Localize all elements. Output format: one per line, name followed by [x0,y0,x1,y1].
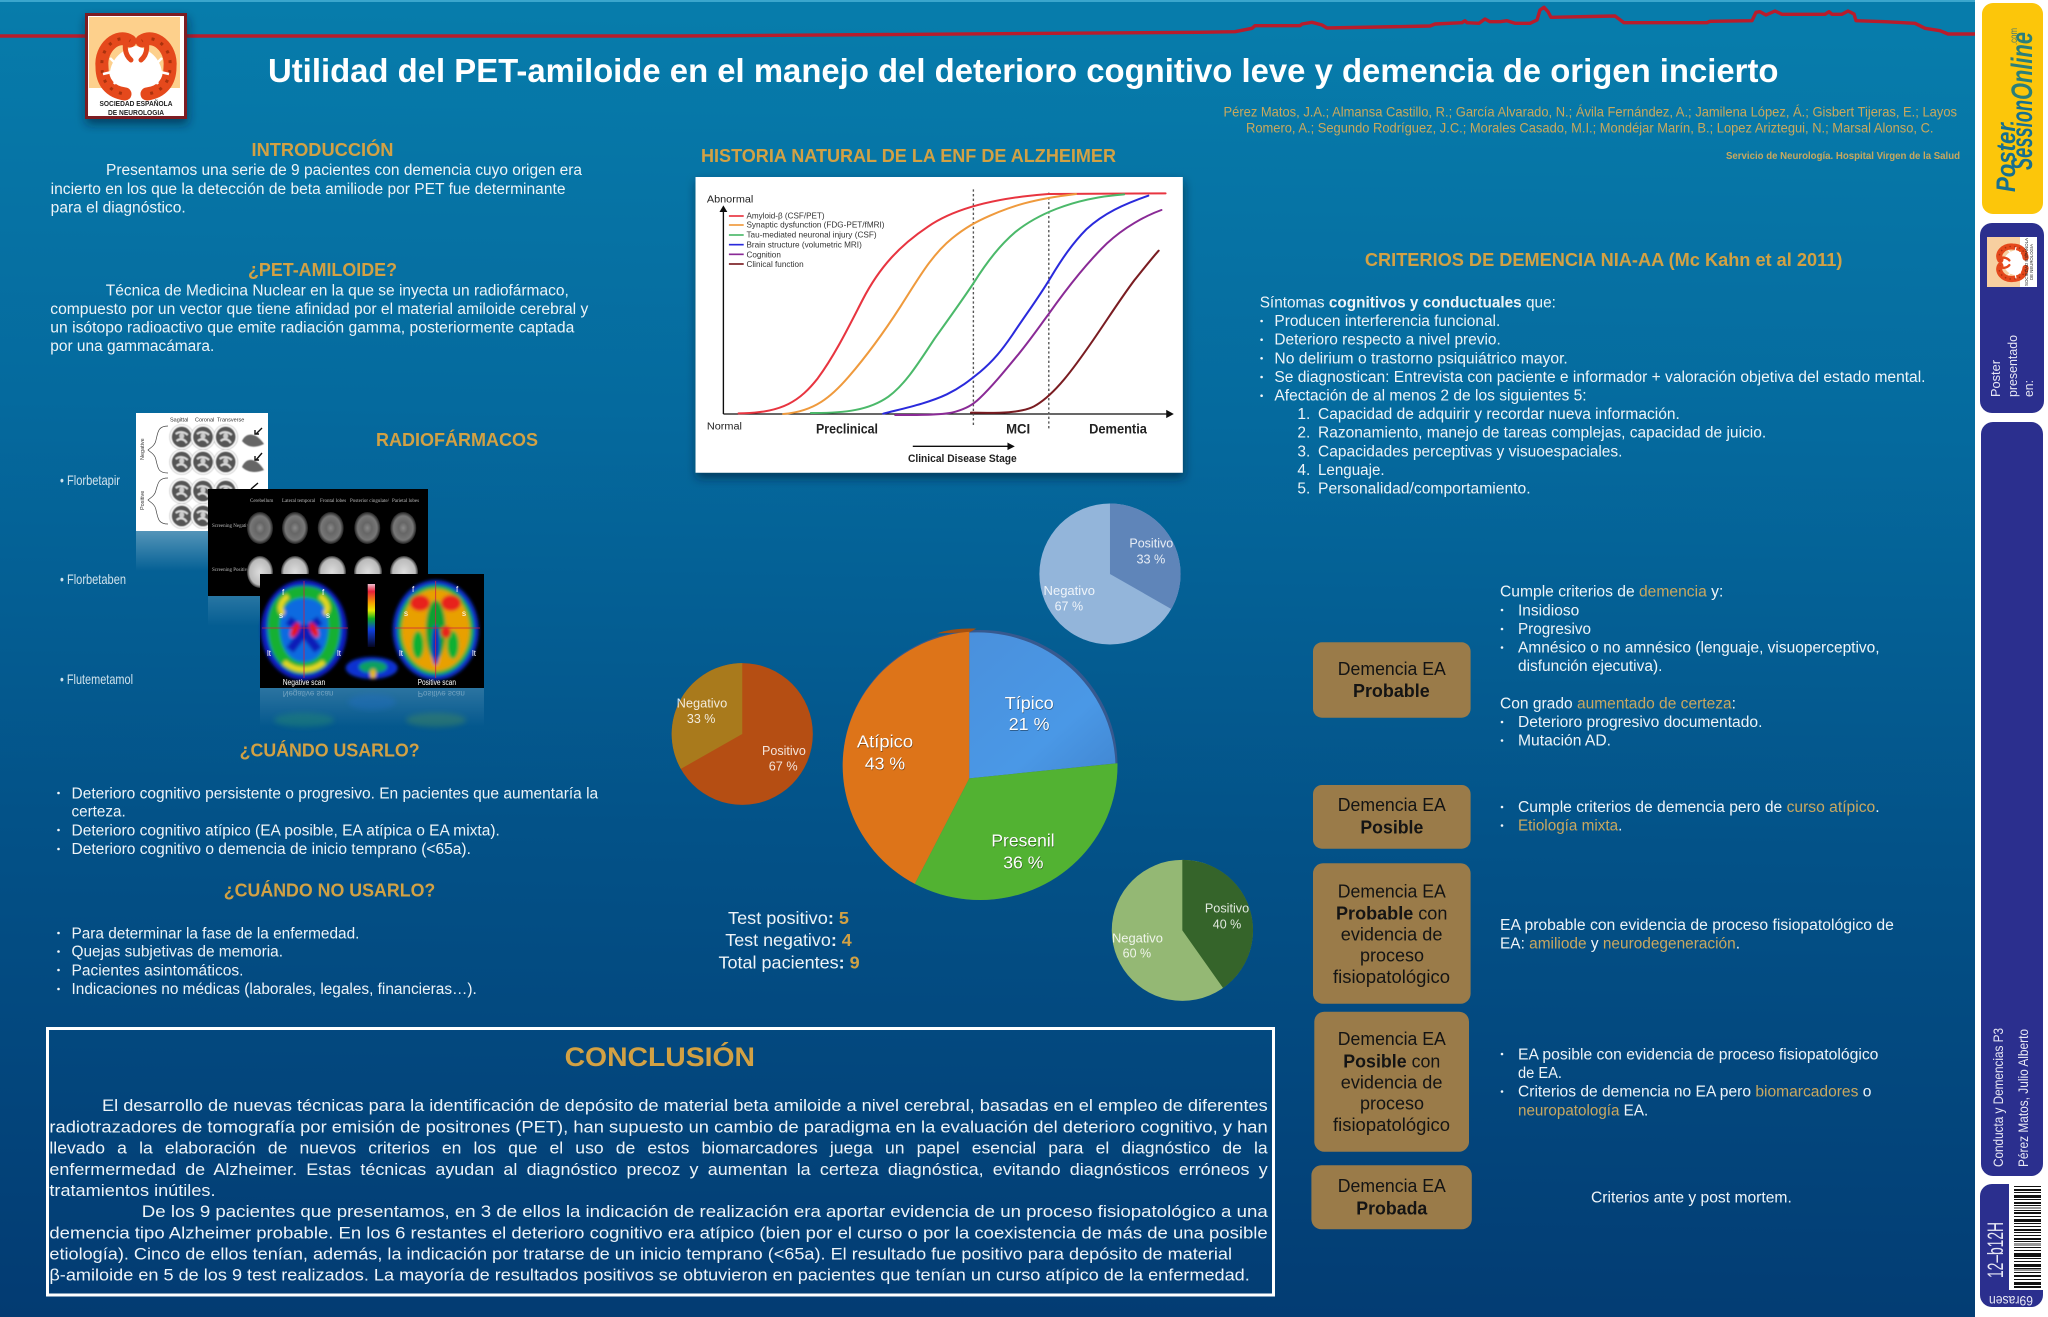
dementia criteria list: Se diagnostican: Entrevista con paciente e informador + valoración objetiva del estado mental. [1274,369,1926,386]
section: cuándo no usarlo [57,880,477,998]
sidebar: PosterSessionOnline badge: .com [2009,28,2020,45]
logo: Sociedad Española de Neurología: SOCIEDAD ESPAÑOLA [100,99,173,108]
pie: negativo/positivo green: 60 % [1123,947,1151,961]
heading: historia natural: HISTORIA NATURAL DE LA ENF DE ALZHEIMER [701,146,1116,166]
image: coloured PET negative and positive scan: Positive scan [418,689,465,698]
sidebar: barcode panel [1980,1184,2044,1309]
authors: Romero, A.; Segundo Rodríguez, J.C.; Morales Casado, M.I.; Mondéjar Marín, B.; Lopez Ariztegui, N.; Marsal Alonso, C. [1246,119,1934,135]
box: demencia EA posible con evidencia: Demencia EA [1338,1029,1446,1049]
pie: tipico, presenil, atipico: 36 % [1003,853,1044,873]
image: amyloid scan grid: Posterior cingulate/ [350,499,390,504]
section: cuándo usarlo: ¿CUÁNDO USARLO? [240,740,420,761]
authors: Pérez Matos, J.A.; Almansa Castillo, R.; García Alvarado, N.; Ávila Fernández, A.; Jamilena López, Á.; Gisbert Tijeras, E.; Layos [1224,104,1957,120]
text: EA probable con evidencia: EA probable con evidencia de proceso fisiopatológico de [1500,917,1894,934]
section: introducción: para el diagnóstico. [51,200,186,216]
box: demencia EA probable con evidencia: fisiopatológico [1333,967,1450,987]
image: amyloid scan grid: Parietal lobes [392,499,419,504]
text: criterios demencia EA probable [1500,584,1880,750]
dementia criteria list: 2. [1297,425,1310,442]
affiliation: Servicio de Neurología. Hospital Virgen de la Salud [1726,150,1960,162]
heading: conclusión: CONCLUSIÓN [565,1041,755,1072]
pie: negativo/positivo orange: 67 % [769,760,798,774]
text: criterios demencia EA probable: Deterioro progresivo documentado. [1518,714,1762,731]
box: demencia EA probable: Probable [1353,681,1430,701]
sidebar: presented at: Poster [1988,359,2003,397]
sidebar: presented at: presentado [2005,335,2020,397]
sidebar: session and author: Pérez Matos, Julio Alberto [2015,1029,2031,1167]
section: cuándo usarlo: Deterioro cognitivo persistente o progresivo. En pacientes que aumentaría la [72,785,599,802]
text: EA posible con evidencia [1501,1046,1878,1119]
axis labels [707,194,1147,465]
image: coloured PET negative and positive scan: f [282,588,285,597]
text: EA probable con evidencia: EA: amiliode y neurodegeneración. [1500,936,1740,953]
sidebar: barcode panel: 69rasen [1989,1293,2033,1309]
pie: negativo/positivo blue: 67 % [1055,599,1083,614]
text: EA probable con evidencia [1500,917,1894,953]
conclusion text: El desarrollo de nuevas técnicas para la identificación de depósito de material beta amiloide a nivel cerebral, basadas en el empleo de diferentes [102,1096,1268,1115]
text: EA posible con evidencia: EA posible con evidencia de proceso fisiopatológico [1518,1046,1878,1063]
sidebar: presented at: en: [2021,380,2036,397]
dementia criteria list: No delirium o trastorno psiquiátrico mayor. [1274,350,1568,367]
pie: tipico, presenil, atipico: 43 % [865,754,905,774]
box: demencia EA posible: Posible [1360,817,1423,837]
legend: Cognition [746,250,781,259]
text: criterios demencia EA probable: disfunción ejecutiva). [1518,658,1662,675]
image: coloured PET negative and positive scan: s [326,611,330,620]
conclusion text: llevado a la elaboración de nuevos criterios en los que el uso de estos biomarcadores juega un papel esencial para el diagnóstico de la [49,1139,1268,1158]
pie: negativo/positivo orange: 33 % [687,712,716,727]
box: demencia EA probable con evidencia: Demencia EA [1338,881,1446,901]
pie: tipico, presenil, atipico: Presenil [991,831,1055,851]
dementia criteria list: Deterioro respecto a nivel previo. [1274,332,1501,349]
section: cuándo no usarlo: Para determinar la fase de la enfermedad. [72,925,359,942]
pie: tipico, presenil, atipico: 21 % [1009,715,1049,735]
section: cuándo usarlo: certeza. [72,804,126,821]
logo: Sociedad Española de Neurología: DE NEUROLOGIA [108,108,165,117]
dementia criteria list: 1. [1297,406,1310,423]
conclusion text [49,1096,1268,1285]
section: pet-amiloide [50,260,589,355]
sidebar: PosterSessionOnline badge: Poster [1991,122,2021,192]
radiopharmaceutical list: • Florbetapir [60,472,120,488]
sidebar: PosterSessionOnline badge [1982,3,2043,214]
section: pet-amiloide: ¿PET-AMILOIDE? [248,260,397,280]
sidebar: PosterSessionOnline badge: Session [2006,100,2039,170]
section: introducción: Presentamos una serie de 9 pacientes con demencia cuyo origen era [106,162,582,179]
pie: negativo/positivo green: Negativo [1112,932,1163,946]
dementia criteria list: 4. [1297,462,1310,479]
section: pet-amiloide: por una gammacámara. [50,338,214,355]
pie: negativo/positivo blue: Positivo [1129,537,1173,551]
sidebar: session and author [1981,422,2043,1176]
image: coloured PET negative and positive scan: Positive scan [418,678,456,687]
stage dividers [973,189,1049,428]
box: demencia EA posible con evidencia: Posible con [1343,1051,1440,1071]
image: amyloid scan grid: Lateral temporal [282,499,316,504]
conclusion text: De los 9 pacientes que presentamos, en 3 de ellos la indicación de realización era aportar evidencia de un proceso fisiopatológico a una [142,1202,1268,1221]
section: cuándo usarlo [57,740,599,858]
text: EA posible con evidencia: neuropatología EA. [1518,1102,1648,1119]
sidebar: barcode panel: 12–b12H [1983,1222,2008,1278]
dementia criteria list: Producen interferencia funcional. [1274,313,1500,330]
box: demencia EA probable: Demencia EA [1338,659,1446,679]
pie: negativo/positivo green [1112,860,1253,1001]
text: criterios demencia EA probable: Insidioso [1518,602,1579,619]
text: EA posible con evidencia: de EA. [1518,1065,1562,1082]
axes [721,207,1172,417]
sidebar logo: SOCIEDAD ESPAÑOLA [2023,238,2029,286]
conclusion text: demencia tipo Alzheimer probable. En los 6 restantes el deterioro cognitivo era atípico (bien por el curso o por la coexistencia de más de una posible [49,1223,1268,1242]
dementia criteria list: Capacidades perceptivas y visuoespaciales. [1318,443,1622,460]
image: amyloid scan grid: Cerebellum [250,499,273,504]
axis labels: Abnormal [707,194,753,206]
logo: Sociedad Española de Neurología [86,14,186,118]
image: coloured PET negative and positive scan: lt [399,649,404,658]
axis labels: Dementia [1089,422,1147,437]
radiopharmaceutical list [60,472,133,687]
text: criterios demencia EA probable: Con grado aumentado de certeza: [1500,695,1736,712]
sidebar: presented at [1980,223,2044,413]
pie: tipico, presenil, atipico [842,628,1118,900]
pie: negativo/positivo blue [1039,503,1181,644]
text: criterios demencia EA probable: Mutación AD. [1518,733,1611,750]
pie: tipico, presenil, atipico: Atípico [857,732,913,752]
pie: negativo/positivo green: 40 % [1213,917,1242,932]
stage arrow [913,444,1013,449]
conclusion text: radiotrazadores de tomografía por emisión de positrones (PET), han supuesto un cambio de paradigma en la evaluación del deterioro cognitivo, y han [49,1117,1268,1136]
dementia criteria list: Capacidad de adquirir y recordar nueva información. [1318,406,1680,423]
dementia criteria list [1260,294,1926,497]
dementia criteria list: 5. [1297,480,1310,497]
pie: negativo/positivo orange [672,663,813,805]
image: amyloid scan grid: Frontal lobes [320,499,346,504]
box: demencia EA probada: Demencia EA [1338,1176,1446,1196]
image: coloured PET negative and positive scan [260,574,484,727]
image: coloured PET negative and positive scan: s [279,611,283,620]
radiopharmaceutical list: • Flutemetamol [60,671,133,687]
section: cuándo no usarlo: Quejas subjetivas de memoria. [72,944,283,961]
section: pet-amiloide: un isótopo radioactivo que emite radiación gamma, posteriormente captada [50,320,575,337]
red skyline line [0,7,1975,36]
section: cuándo usarlo: Deterioro cognitivo o demencia de inicio temprano (<65a). [72,841,471,858]
image: amyloid scan grid: Screening Positive [212,568,250,573]
dementia criteria list: Afectación de al menos 2 de los siguientes 5: [1274,388,1587,405]
image: coloured PET negative and positive scan: lt [337,649,342,658]
sidebar logo: DE NEUROLOGIA [2029,244,2034,280]
heading: criterios de demencia: CRITERIOS DE DEMENCIA NIA-AA (Mc Kahn et al 2011) [1365,250,1842,270]
axis labels: Preclinical [816,422,878,437]
box: demencia EA probable con evidencia: evidencia de [1341,925,1442,945]
image: grayscale PET slices: Transverse [217,418,244,424]
section: pet-amiloide: compuesto por un vector que tiene afinidad por el material amiloide cerebral y [50,301,589,318]
box: demencia EA posible con evidencia: fisiopatológico [1333,1115,1450,1135]
pie charts and test summary [672,503,1253,1001]
box: demencia EA probable con evidencia [1313,863,1471,1004]
box: demencia EA posible [1313,785,1471,849]
text: criterios demencia EA posible: Etiología mixta. [1518,818,1622,835]
section: cuándo no usarlo: Pacientes asintomáticos. [72,962,244,979]
box: demencia EA probable con evidencia: proceso [1360,946,1424,966]
image: coloured PET negative and positive scan: f [412,585,415,594]
section: introducción: incierto en los que la detección de beta amiliode por PET fue determinante [51,181,565,198]
pie: negativo/positivo blue: Negativo [1044,584,1095,599]
section: pet-amiloide: Técnica de Medicina Nuclear en la que se inyecta un radiofármaco, [106,283,569,300]
text: criterios demencia EA probable: Cumple criterios de demencia y: [1500,584,1723,601]
section: cuándo no usarlo: Indicaciones no médicas (laborales, legales, financieras…). [72,981,477,998]
dementia criteria list: Razonamiento, manejo de tareas complejas, capacidad de juicio. [1318,425,1766,442]
box: demencia EA posible: Demencia EA [1338,795,1446,815]
image: coloured PET negative and positive scan: s [404,609,408,618]
box: demencia EA posible con evidencia [1314,1012,1469,1152]
dementia criteria list: Lenguaje. [1318,462,1385,479]
axis labels: Clinical Disease Stage [908,453,1017,465]
test summary: Total pacientes: 9 [719,953,860,973]
box: demencia EA posible con evidencia: evidencia de [1341,1072,1442,1092]
sidebar logo [1987,237,2037,287]
image: coloured PET negative and positive scan: Negative scan [283,678,325,687]
pie: negativo/positivo orange: Positivo [762,744,806,759]
legend: Tau-mediated neuronal injury (CSF) [746,231,877,240]
test summary [719,909,860,973]
image: grayscale PET slices: Coronal [195,418,214,424]
section: cuándo usarlo: Deterioro cognitivo atípico (EA posible, EA atípica o EA mixta). [72,822,500,839]
radiopharmaceutical list: • Florbetaben [60,571,126,587]
legend: Amyloid-β (CSF/PET) [746,211,825,220]
dementia criteria list: 3. [1297,443,1310,460]
image: coloured PET negative and positive scan: Negative scan [283,689,333,698]
section: introducción [51,139,582,216]
image: coloured PET negative and positive scan: f [456,585,459,594]
box: demencia EA probada: Probada [1356,1198,1428,1218]
pie: negativo/positivo green: Positivo [1205,902,1249,916]
image: coloured PET negative and positive scan: lt [472,649,477,658]
curves [739,193,1166,415]
chart: natural history curves [696,177,1183,473]
section: introducción: INTRODUCCIÓN [252,139,394,160]
section: cuándo no usarlo: ¿CUÁNDO NO USARLO? [224,880,435,901]
authors [1224,104,1957,135]
image: coloured PET negative and positive scan: lt [267,649,272,658]
conclusion text: etiología). Cinco de ellos tenían, además, la indicación por tratarse de un inicio temprano (<65a). El resultado fue positivo para depósito de material [49,1244,1232,1263]
legend: Clinical function [746,260,804,269]
sidebar: session and author: Conducta y Demencias P3 [1990,1028,2006,1167]
legend [729,211,885,269]
text: criterios demencia EA probable: Progresivo [1518,621,1591,638]
box: demencia EA probada [1311,1165,1472,1229]
pie: negativo/positivo blue: 33 % [1136,552,1166,567]
dementia criteria list: Personalidad/comportamiento. [1318,480,1531,497]
axis labels: MCI [1006,422,1030,437]
image: grayscale PET slices: Negative [140,438,146,460]
pie: negativo/positivo orange: Negativo [677,696,727,711]
legend: Brain structure (volumetric MRI) [746,240,862,249]
conclusion text: enfermermedad de Alzheimer. Estas técnicas ayudan al diagnóstico precoz y aumentan la certeza diagnóstica, evitando diagnósticos erróneos y [49,1160,1268,1179]
text: criterios demencia EA posible [1501,799,1880,835]
text: criterios ante y post mortem: Criterios ante y post mortem. [1591,1190,1792,1207]
legend: Synaptic dysfunction (FDG-PET/fMRI) [746,221,885,230]
text: criterios demencia EA posible: Cumple criterios de demencia pero de curso atípico. [1518,799,1880,816]
sidebar: PosterSessionOnline badge: Online [2006,32,2039,100]
test summary: Test positivo: 5 [728,909,849,929]
image: amyloid scan grid: Screening Negative [212,524,252,529]
panel: conclusión [48,1028,1274,1295]
image: grayscale PET slices: Positive [140,491,146,510]
box: demencia EA posible con evidencia: proceso [1360,1094,1424,1114]
image: grayscale PET slices [136,413,268,571]
image: grayscale PET slices: Sagittal [170,418,188,424]
test summary: Test negativo: 4 [725,930,852,951]
image: amyloid scan grid [208,489,428,626]
image: coloured PET negative and positive scan: s [462,609,466,618]
heading: radiofármacos: RADIOFÁRMACOS [376,429,538,450]
conclusion text: tratamientos inútiles. [49,1181,216,1200]
text: criterios demencia EA probable: Amnésico o no amnésico (lenguaje, visuoperceptivo, [1518,640,1880,657]
dementia criteria list: Síntomas cognitivos y conductuales que: [1260,294,1556,311]
image: coloured PET negative and positive scan: f [322,588,325,597]
axis labels: Normal [707,420,742,432]
conclusion text: β-amiloide en 5 de los 9 test realizados. La mayoría de resultados positivos se obtuvieron en pacientes que tenían un curso atípico de la enfermedad. [49,1266,1250,1285]
pie: tipico, presenil, atipico: Típico [1005,694,1054,714]
box: demencia EA probable [1313,642,1471,718]
box: demencia EA probable con evidencia: Probable con [1336,904,1447,924]
title: Utilidad del PET-amiloide en el manejo del deterioro cognitivo leve y demencia de origen incierto [268,53,1778,90]
text: EA posible con evidencia: Criterios de demencia no EA pero biomarcadores o [1518,1084,1871,1101]
